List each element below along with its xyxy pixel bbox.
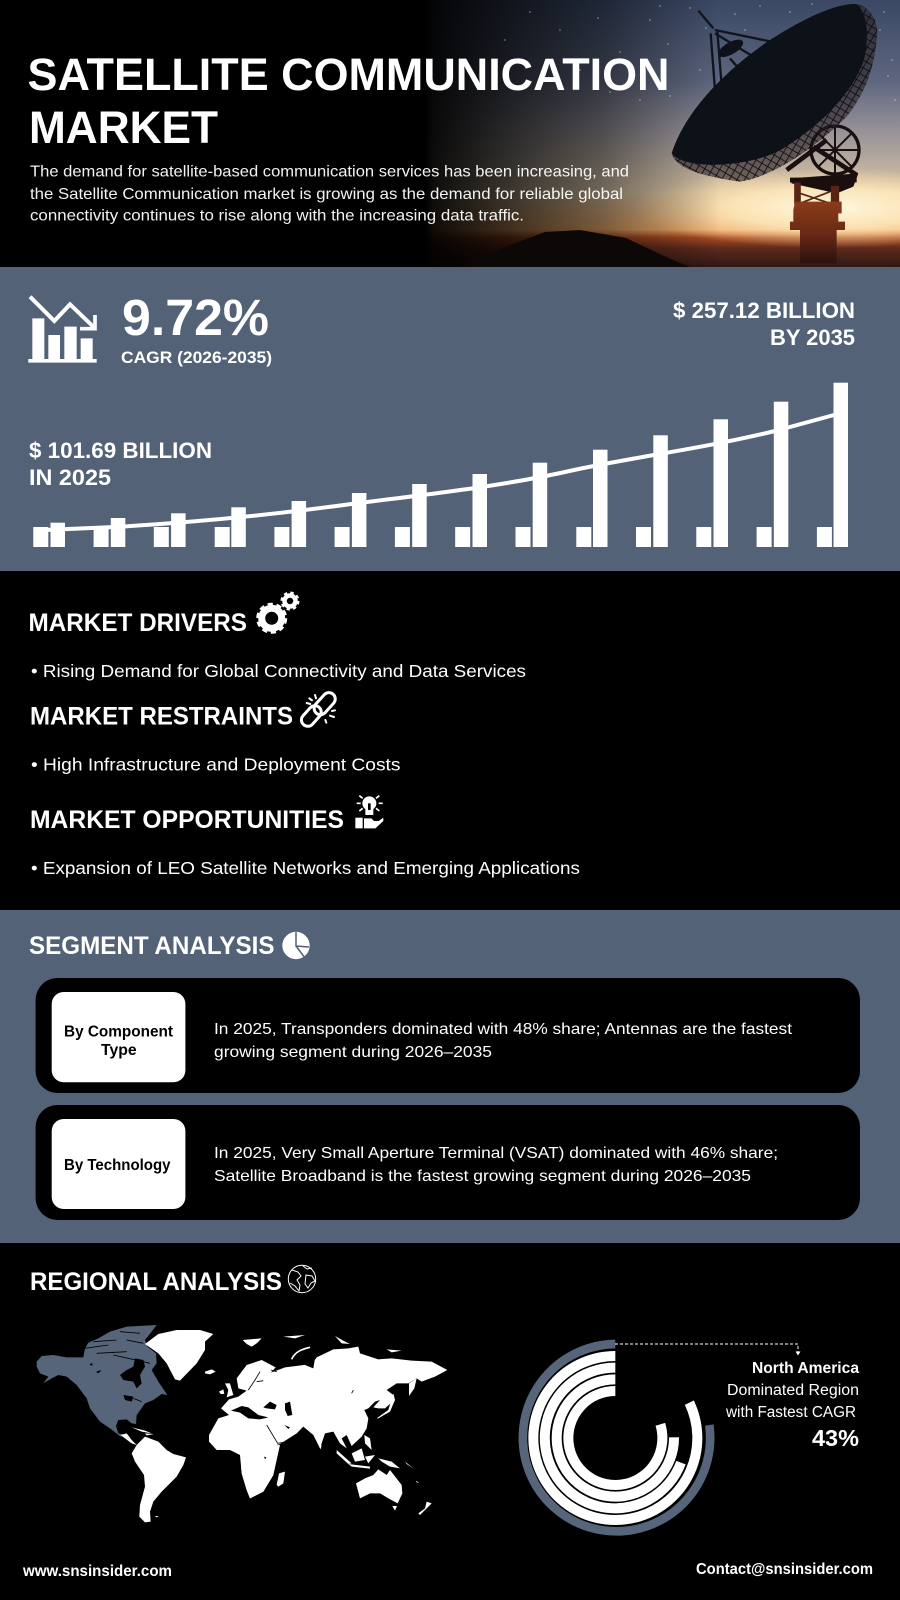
2025 market value: $ 101.69 BILLION (29, 438, 212, 463)
title: SATELLITE COMMUNICATION (28, 49, 670, 100)
heading: market restraints: MARKET RESTRAINTS (30, 702, 293, 730)
card: by component type: By Component (64, 1024, 173, 1040)
icon: lightbulb over hand (355, 796, 383, 828)
title: MARKET (29, 102, 218, 153)
heading: market opportunities: MARKET OPPORTUNITIES (30, 806, 344, 834)
world map with North America highlighted (37, 1325, 447, 1522)
bar chart with growth line (33, 383, 848, 547)
panel: drivers, restraints, opportunities (0, 571, 900, 910)
CAGR figure (121, 289, 272, 367)
CAGR figure: CAGR (2026-2035) (121, 348, 272, 367)
2035 market value: $ 257.12 BILLION (673, 298, 855, 323)
text: driver: • Rising Demand for Global Connectivity and Data Services (31, 661, 526, 681)
panel: segment analysis (0, 910, 900, 1243)
2035 market value (673, 298, 855, 350)
footer: contact email: Contact@snsinsider.com (696, 1561, 873, 1578)
intro paragraph: The demand for satellite-based communication services has been increasing, and (30, 164, 629, 180)
card: by component type: In 2025, Transponders dominated with 48% share; Antennas are the fastest (214, 1021, 793, 1038)
card: by technology (36, 1105, 860, 1220)
callout: North America share: with Fastest CAGR (725, 1404, 856, 1421)
card: by technology: By Technology (64, 1157, 171, 1174)
card: by technology: Satellite Broadband is the fastest growing segment during 2026–2035 (214, 1168, 751, 1185)
icon: broken chain (299, 690, 338, 729)
text: opportunity: • Expansion of LEO Satellite Networks and Emerging Applications (31, 858, 580, 878)
2025 market value: IN 2025 (29, 465, 111, 490)
icon: pie chart (282, 932, 310, 959)
intro paragraph (30, 164, 629, 224)
icon: gears (258, 593, 298, 632)
icon: falling-line bar chart (28, 297, 97, 363)
panel: regional analysis (0, 1243, 900, 1600)
header banner (0, 0, 900, 267)
arrow: dashed leader line (615, 1344, 800, 1356)
heading: regional analysis: REGIONAL ANALYSIS (30, 1268, 282, 1296)
card: by component type: Type (101, 1042, 137, 1059)
footer: website: www.snsinsider.com (22, 1563, 172, 1580)
callout: North America share: North America (752, 1360, 859, 1377)
intro paragraph: connectivity continues to rise along with the increasing data traffic. (30, 208, 524, 224)
radial chart: regional share (523, 1344, 710, 1531)
card: by technology: In 2025, Very Small Aperture Terminal (VSAT) dominated with 46% share; (214, 1145, 778, 1162)
icon: globe (288, 1265, 316, 1293)
heading: segment analysis: SEGMENT ANALYSIS (29, 932, 274, 960)
card: by component type (36, 978, 860, 1093)
callout: North America share (725, 1360, 859, 1451)
card: by component type: growing segment during 2026–2035 (214, 1044, 492, 1061)
2035 market value: BY 2035 (770, 325, 855, 350)
title (28, 49, 670, 153)
heading: market drivers: MARKET DRIVERS (28, 609, 247, 637)
panel: market size and growth (0, 267, 900, 571)
callout: North America share: 43% (812, 1425, 859, 1451)
2025 market value (29, 438, 212, 490)
photo: radio telescope at sunset (425, 0, 900, 267)
callout: North America share: Dominated Region (727, 1382, 859, 1399)
text: restraint: • High Infrastructure and Deployment Costs (31, 754, 401, 774)
CAGR figure: 9.72% (122, 289, 269, 346)
intro paragraph: the Satellite Communication market is growing as the demand for reliable global (30, 186, 623, 203)
